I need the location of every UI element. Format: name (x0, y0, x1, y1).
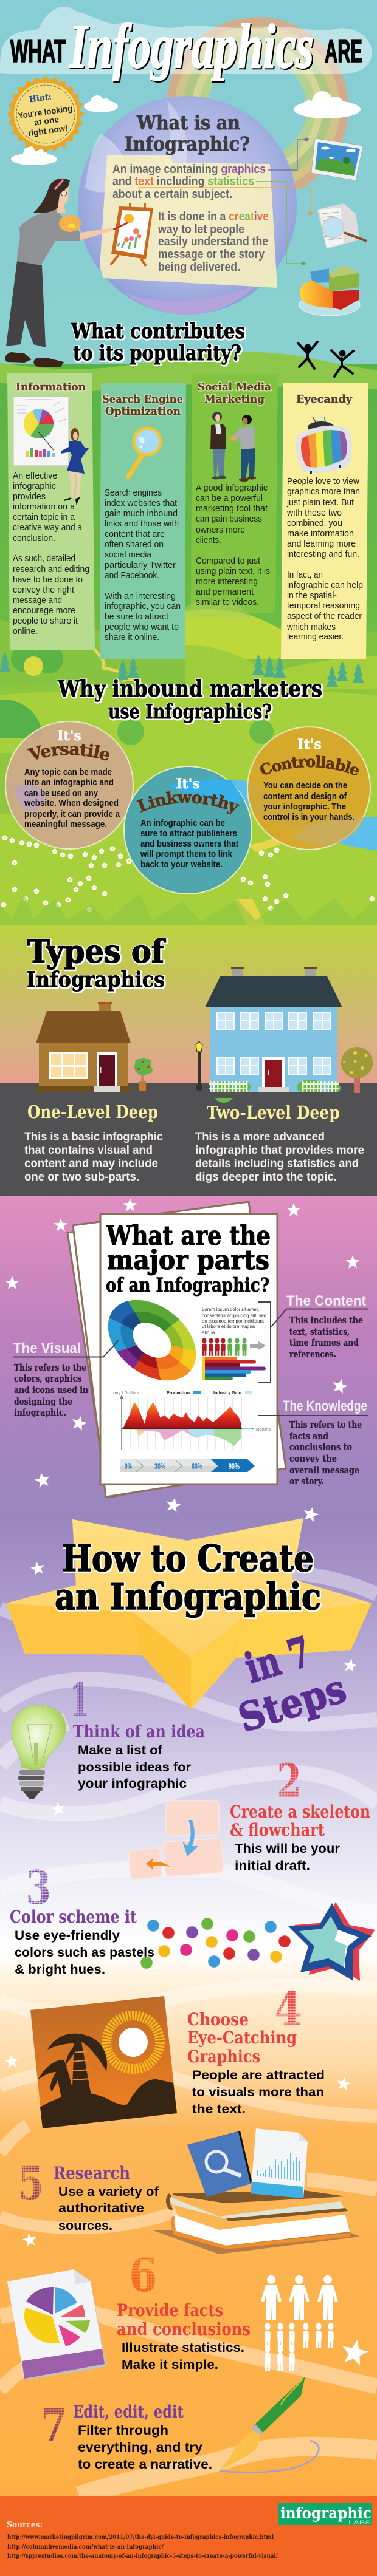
callout: the content (271, 1293, 368, 1360)
panel: paper with major parts (67, 1202, 286, 1498)
text: step 5: Research (54, 2163, 130, 2183)
text: step 3: colors such as pastels (15, 1946, 154, 1960)
background: pink section (0, 1196, 377, 1518)
callout: versatile: into an infographic and (24, 777, 114, 788)
heading: what is an infographic: What is an (136, 111, 240, 134)
text: lorem ipsum (202, 1307, 266, 1335)
text: information: As such, detailed (13, 553, 75, 564)
text: social media: marketing tool that (196, 503, 268, 514)
stars (4, 1198, 370, 2367)
text: step 4: Choose (187, 2009, 249, 2029)
icon: two people talking (210, 412, 256, 482)
text: seo: gain much inbound (105, 508, 178, 519)
text: eyecandy: interesting and fun. (287, 549, 359, 559)
icon: pie chart (299, 265, 360, 316)
background: green landscape (0, 352, 377, 929)
callout: the content: time frames and (289, 1337, 359, 1348)
callout: controllable: You can decide on the (263, 780, 347, 791)
text: step 6: Provide facts (117, 2300, 223, 2320)
callout: controllable: content and design of (263, 791, 347, 802)
panel: social media marketing (191, 374, 278, 613)
callout: controllable: Controllable (260, 755, 359, 775)
text: social media: A good infographic (196, 483, 268, 493)
sources: http://www.marketingpilgrim.com/2011/07/the-dyi-guide-to-infographics-infographic.html (7, 2534, 274, 2541)
text: step 2: & flowchart (230, 1820, 325, 1840)
callout: versatile: properly, it can provide a (24, 809, 120, 819)
text: eyecandy: in the spatial- (287, 590, 337, 601)
logo: infographic labs: infographic (280, 2504, 372, 2522)
text: step 7: everything, and try (78, 2441, 202, 2455)
text: step 4: to visuals more than (192, 2085, 324, 2099)
icon: colored balls (140, 1918, 291, 1969)
heading: seo: Optimization (105, 405, 181, 418)
callout: controllable: It's (297, 737, 322, 752)
callout: the knowledge: conclusions to (289, 1442, 352, 1453)
text: eyecandy: and learning more (287, 539, 356, 549)
flowers (1, 835, 375, 912)
chart: 3d donut (102, 1292, 202, 1389)
text: information: encourage more (13, 605, 75, 616)
bracket and leaders (258, 1302, 271, 1383)
icon: magnifying glass (128, 428, 161, 477)
callout: controllable: control is in your hands. (263, 812, 355, 822)
definition text: being delivered. (158, 261, 240, 274)
text: seo: content that are (105, 529, 165, 539)
text: step 1: Make a list of (78, 1743, 163, 1757)
callout: linkworthy (123, 766, 252, 894)
callout: the knowledge: overall message (289, 1465, 359, 1476)
text: eyecandy: In fact, an (287, 570, 323, 580)
background: hills over lower columns (185, 598, 377, 689)
definition text: easily understand the (158, 235, 268, 248)
badge: hint: You're looking (18, 103, 73, 120)
chart: progress arrow: 0% (125, 1462, 132, 1471)
text: social media: using plain text, it is (196, 566, 270, 576)
heading: major parts: major parts (107, 1245, 269, 1276)
text: social media: owners more (196, 525, 245, 535)
text: step 7 (73, 2402, 212, 2472)
panel: search engine optimization (100, 383, 186, 659)
background: lilac to orange section (0, 1518, 377, 2496)
definition text: and text including statistics (112, 175, 254, 188)
callout: the knowledge: or story. (289, 1476, 324, 1487)
back sheets (67, 1202, 286, 1498)
text: seo (105, 488, 181, 642)
callout: the visual: and icons used in (14, 1385, 88, 1395)
heading: social media: Social Media (198, 381, 271, 394)
text: eyecandy: which makes (286, 622, 336, 632)
illustration: big house (196, 967, 373, 1103)
text: step 7: Filter through (78, 2424, 168, 2438)
heading: eyecandy: Eyecandy (296, 393, 353, 406)
callout: the content: The Content (286, 1293, 366, 1309)
callout: versatile: can be used on any (24, 788, 99, 799)
heading: types of infographics: Infographics (27, 967, 165, 992)
text: information: research and editing (13, 564, 89, 574)
callout: versatile (5, 721, 134, 850)
heading: major parts (106, 1221, 271, 1297)
heading: why inbound marketers: Why inbound marketers (57, 675, 322, 702)
sources: Sources: (7, 2520, 43, 2530)
text: lorem ipsum: do eiusmod tempor incididunt (202, 1318, 265, 1324)
callout: the visual: The Visual (13, 1340, 81, 1357)
chart: progress arrow: 30% (154, 1462, 165, 1471)
background: types section (0, 925, 377, 1084)
chart: area chart: Industry Gain (213, 1390, 241, 1395)
text: one-level deep: content and may include (24, 1157, 158, 1170)
text: eyecandy: with these two (286, 508, 342, 518)
text: seo: With an interesting (105, 591, 176, 601)
callout: linkworthy: and business owners that (140, 839, 238, 849)
text: information: provides (13, 491, 46, 502)
text: seo: be sure to attract (105, 612, 169, 622)
text: eyecandy: graphics more than (287, 486, 360, 497)
text: step 4 (187, 2009, 325, 2116)
text: step 4: Eye-Catching (187, 2028, 297, 2048)
text: step 6: Illustrate statistics. (122, 2341, 244, 2355)
badge: hint: Hint: (29, 92, 52, 104)
step 3 (10, 1861, 375, 1981)
text: information: infographic (13, 481, 56, 491)
text: information: information on a (13, 502, 75, 512)
chart: area chart: Months (256, 1426, 271, 1432)
text: two-level deep (195, 1102, 364, 1184)
callout: the knowledge: This refers to the (289, 1419, 362, 1430)
number 3: 3 (26, 1861, 51, 1915)
heading: how to create an infographic: How to Create (62, 1538, 314, 1580)
callout: the visual: designing the (14, 1396, 72, 1407)
text: seo: and Facebook. (105, 570, 159, 581)
text: step 1: possible ideas for (78, 1760, 191, 1774)
badge: hint: right now! (27, 123, 69, 138)
text: information: An effective (13, 471, 57, 481)
callout: controllable (247, 726, 371, 850)
sources (7, 2520, 278, 2560)
text: information: have to be done to (13, 574, 83, 585)
heading: what is an infographic (125, 111, 250, 155)
callout: linkworthy: An infographic can be (140, 818, 225, 828)
heading: what contributes to its popularity (71, 319, 245, 366)
callout: the visual: infographic. (14, 1407, 66, 1418)
definition text (112, 163, 269, 274)
text: two-level deep: This is a more advanced (195, 1131, 325, 1143)
icon: books with search and document (153, 2128, 360, 2254)
callout: versatile: meaningful message. (24, 819, 107, 830)
rainbow (170, 21, 344, 195)
number 6: 6 (129, 2248, 157, 2302)
text: information: conclusion. (13, 533, 55, 543)
text: one-level deep: one or two sub-parts. (24, 1171, 139, 1184)
text: seo: people who want to (105, 622, 179, 632)
text: seo: index websites that (105, 498, 178, 508)
text: eyecandy: infographic can help (287, 580, 363, 590)
text: seo: often shared on (105, 539, 164, 550)
step 7 (41, 2376, 319, 2472)
road (0, 1083, 377, 1196)
clouds (11, 91, 361, 165)
chart: area chart: ney / Dollars (113, 1390, 139, 1395)
step 6 (7, 2248, 338, 2380)
heading: social media: Marketing (204, 393, 265, 406)
badge: hint (7, 75, 85, 153)
number 1: 1 (70, 1673, 89, 1727)
text: step 1 (73, 1722, 205, 1791)
text: social media (196, 483, 270, 607)
callout: versatile: Any topic can be made (24, 767, 112, 777)
heading: information: Information (16, 381, 86, 394)
text: lorem ipsum: ut labore et dolore magna (202, 1324, 255, 1329)
text: eyecandy: just plain text. But (286, 497, 355, 508)
text: social media: can gain business (196, 514, 262, 524)
step 4 (30, 1982, 325, 2128)
heading: types of infographics: Types of (27, 933, 166, 970)
text: two-level deep: digs deeper into the topic. (195, 1171, 337, 1184)
heading: what is an infographic: Infographic? (125, 132, 250, 155)
heading: what contributes to its popularity: What contributes (71, 319, 245, 344)
heading: in 7 steps (233, 1627, 351, 1742)
icon: dancing figures (298, 342, 353, 377)
title: WHAT (10, 34, 66, 69)
text: social media: and permanent (196, 587, 254, 597)
text: information: online. (13, 626, 38, 636)
text: lorem ipsum: Lorem ipsum dolor sit amet, (202, 1307, 259, 1312)
text: information: creative way and a (13, 522, 83, 533)
text: seo: social media (105, 550, 152, 560)
text: step 3: Use eye-friendly (15, 1929, 120, 1943)
callout: controllable: your infographic. The (263, 802, 346, 812)
text: step 5: Use a variety of (58, 2185, 159, 2199)
icon: palm tree picture (30, 1996, 177, 2128)
callout: the visual: This refers to the (14, 1362, 86, 1373)
text: eyecandy: make information (287, 528, 354, 539)
footer band (0, 2496, 377, 2576)
icon: rainbow tv (296, 417, 352, 474)
callout: the knowledge (258, 1398, 368, 1487)
panel: information (7, 373, 95, 650)
icon: big star (6, 1518, 372, 1709)
callout: the visual: colors, graphics (14, 1373, 81, 1384)
text: seo: Search engines (105, 488, 162, 498)
chart: horizontal bars (202, 1357, 266, 1380)
heading: seo (102, 393, 183, 418)
callout: linkworthy: It's (176, 776, 200, 792)
title cloud (0, 7, 372, 74)
text: information: certain topic in a (13, 512, 75, 522)
number 4: 4 (274, 1982, 302, 2036)
callout: the content: This includes the (289, 1315, 363, 1326)
chart: progress arrow: 90% (229, 1462, 240, 1471)
definition text: An image containing graphics (112, 163, 266, 176)
text: step 2: This will be your (235, 1842, 340, 1856)
icon: easel painting (111, 203, 153, 266)
heading: in 7 steps: in 7 (240, 1627, 317, 1693)
icon: document with pie chart (7, 2269, 106, 2380)
text: social media: more interesting (196, 576, 258, 587)
number 2: 2 (277, 1754, 302, 1808)
text: two-level deep: Two-Level Deep (207, 1102, 340, 1123)
text: step 1: your infographic (78, 1777, 187, 1791)
logo: infographic labs: LABS (348, 2520, 371, 2526)
text: eyecandy: combined, you (287, 518, 342, 528)
text: seo: links and those with (105, 519, 179, 529)
text: seo: infographic, you can (105, 601, 181, 612)
number 7: 7 (41, 2398, 67, 2452)
globe (78, 96, 297, 315)
text: two-level deep: details including statistics and (195, 1157, 359, 1170)
chart: progress arrow (120, 1459, 255, 1472)
text: information: people to share it (13, 616, 78, 626)
text: social media: clients. (196, 535, 221, 545)
icon: people row (202, 1338, 266, 1356)
callout: the knowledge: convey the (289, 1453, 337, 1464)
definition text: way to let people (157, 223, 244, 236)
illustration: woman painting (5, 179, 112, 367)
callout: the visual (13, 1340, 119, 1418)
icon: chart and presenter (13, 397, 89, 503)
text: step 5 (54, 2163, 159, 2233)
icon: pen (220, 2376, 319, 2472)
heading: seo: Search Engine (102, 393, 183, 406)
text: step 5: authoritative (58, 2201, 144, 2215)
heading: how to create an infographic (55, 1538, 321, 1618)
icon: people statistics (261, 2275, 338, 2371)
text: eyecandy: learning easier. (287, 632, 344, 642)
text: social media: can be a powerful (196, 493, 263, 503)
text: eyecandy: temporal reasoning (287, 601, 360, 611)
background: sky (0, 0, 377, 389)
definition text: It is done in a creative (158, 210, 269, 223)
heading: social media (198, 381, 271, 406)
text: eyecandy: People love to view (287, 476, 359, 486)
heading: how to create an infographic: an Infographic (55, 1576, 321, 1618)
chart: area chart (113, 1390, 271, 1450)
text: step 4: the text. (192, 2102, 246, 2116)
text: seo: share it online. (105, 632, 159, 642)
text: step 7: to create a narrative. (78, 2458, 212, 2472)
text: lorem ipsum: consectetur adipisicing elit, sed (202, 1313, 266, 1318)
callout: the knowledge: facts and (289, 1431, 328, 1442)
icon: 3d star (288, 1902, 375, 1981)
text: two-level deep: infographic that provides more (195, 1144, 364, 1157)
heading: why inbound marketers (57, 675, 322, 723)
text: one-level deep: One-Level Deep (27, 1102, 158, 1122)
sources: http://spyrestudios.com/the-anatomy-of-an-infographic-5-steps-to-create-a-powerful-visual/ (7, 2553, 278, 2560)
badge: hint: at one (33, 114, 60, 128)
text: information: message and (13, 595, 62, 605)
heading: why inbound marketers: use Infographics? (108, 700, 272, 723)
callout: linkworthy: will prompt them to link (140, 849, 233, 859)
heading: types of infographics (27, 933, 166, 992)
text: step 3 (10, 1907, 154, 1977)
text: step 4: People are attracted (192, 2068, 325, 2082)
callout: linkworthy: sure to attract publishers (140, 828, 237, 839)
text: information: convey the right (13, 585, 75, 595)
number 5: 5 (18, 2156, 44, 2210)
text: one-level deep (24, 1102, 163, 1184)
heading: what contributes to its popularity: to its popularity? (73, 341, 241, 366)
icon: picture (311, 138, 363, 180)
text: one-level deep: that contains visual and (24, 1144, 153, 1157)
text: step 6: Make it simple. (122, 2358, 218, 2372)
text: step 3: Color scheme it (10, 1907, 137, 1927)
heading: major parts: What are the (106, 1221, 271, 1252)
text: step 2 (230, 1802, 370, 1873)
definition text: message or the story (158, 248, 265, 261)
text: social media: Compared to just (196, 556, 261, 566)
callout: the content: text, statistics, (289, 1326, 350, 1337)
text: step 6 (117, 2300, 251, 2372)
callout: linkworthy: Linkworthy (136, 791, 240, 814)
text: step 6: and conclusions (117, 2319, 251, 2339)
text: step 5: sources. (58, 2219, 112, 2233)
definition text: about a certain subject. (112, 188, 232, 201)
text: social media: similar to videos. (196, 597, 259, 607)
illustration: small house (36, 1002, 153, 1092)
text: information (13, 471, 89, 636)
panel: definition (100, 155, 277, 288)
sources: http://columnfivemedia.com/what-is-an-infographic/ (7, 2544, 164, 2550)
text: lorem ipsum: aliqua. (202, 1330, 216, 1335)
text: step 4: Graphics (187, 2046, 260, 2067)
background: grass (0, 893, 377, 929)
icon: flowchart (128, 1801, 224, 1880)
callout: the content: references. (289, 1349, 336, 1360)
chart: area chart: Production (167, 1390, 190, 1395)
callout: linkworthy: back to your website. (140, 859, 223, 870)
text: step 7: Edit, edit, edit (73, 2402, 184, 2422)
text: one-level deep: This is a basic infographic (24, 1131, 163, 1143)
callout: versatile: It's (57, 728, 81, 744)
heading: in 7 steps: Steps (233, 1666, 351, 1742)
text: step 2: initial draft. (235, 1859, 310, 1873)
step 2 (128, 1754, 370, 1880)
text: eyecandy (286, 476, 363, 642)
icon: document with magnifier (317, 203, 367, 249)
icon: light bulb (12, 1705, 66, 1799)
callout: versatile: Versatile (27, 743, 109, 760)
connector lines (138, 140, 310, 264)
text: step 1: Think of an idea (73, 1722, 205, 1742)
heading: major parts: of an Infographic? (106, 1273, 269, 1297)
text: seo: particularly Twitter (105, 560, 176, 570)
chart: progress arrow: 60% (192, 1462, 202, 1471)
step 5 (18, 2128, 360, 2254)
callout: versatile: website. When designed (24, 798, 119, 808)
panel: eyecandy (281, 383, 368, 659)
text: eyecandy: aspect of the reader (287, 611, 362, 621)
step 1 (12, 1673, 205, 1799)
text: step 3: & bright hues. (15, 1963, 105, 1977)
